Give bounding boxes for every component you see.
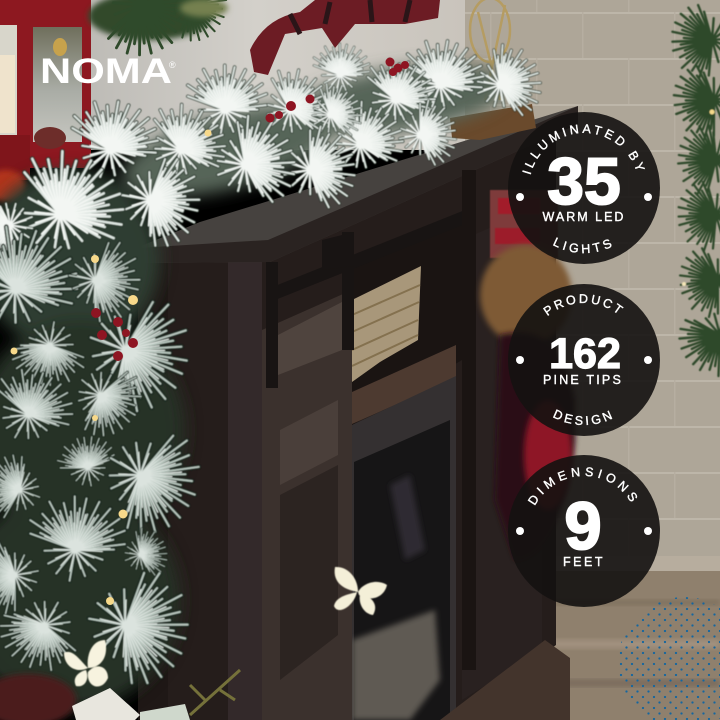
wood floor — [540, 571, 720, 720]
stocking body — [495, 333, 575, 560]
badge: 9 feet — [508, 455, 660, 607]
bell — [53, 38, 67, 56]
red berries — [91, 58, 409, 361]
icon: butterfly left — [64, 640, 108, 687]
fireplace log — [352, 610, 440, 720]
badge side dots — [516, 527, 652, 535]
plaid reindeer — [250, 0, 440, 75]
bottom decorations — [0, 670, 240, 720]
shelf board — [352, 345, 456, 424]
wood block — [450, 104, 536, 140]
badge arc heading: PRODUCT — [543, 294, 624, 316]
icon: butterfly centre — [334, 567, 387, 615]
badge: 35 warm LED lights — [508, 112, 660, 264]
door panel — [280, 400, 338, 485]
brick wall — [440, 0, 720, 560]
pale wall — [85, 0, 465, 150]
lantern — [0, 0, 91, 202]
left panel shading — [138, 262, 168, 720]
cabinet top surface — [136, 106, 578, 263]
badge arc heading: DIMENSIONS — [528, 467, 638, 506]
badge: 162 pine tips — [508, 284, 660, 436]
badge side dots — [516, 356, 652, 364]
lantern glass — [33, 27, 82, 142]
halftone dot circle — [618, 597, 720, 720]
label pine tips: PINE TIPS — [543, 373, 623, 387]
door rail and hangers — [266, 208, 470, 388]
number 35: 35 — [547, 144, 621, 218]
label warm LED: WARM LED — [543, 210, 625, 224]
poinsettia — [0, 674, 76, 720]
badge arc heading: ILLUMINATED BY — [522, 124, 646, 174]
garland shadow mass — [0, 53, 513, 710]
warm LED lights — [10, 130, 212, 605]
cabinet body — [138, 130, 556, 720]
fireplace glass — [354, 420, 450, 720]
fire glass reflection — [390, 475, 425, 560]
orange ornament — [0, 170, 26, 202]
lantern frame — [0, 0, 91, 168]
gold wire decoration — [470, 0, 510, 100]
right pine tree — [667, 2, 720, 389]
registered mark: ® — [169, 60, 176, 70]
badge arc footer: LIGHTS — [552, 237, 612, 254]
wicker basket — [352, 266, 421, 382]
number 9: 9 — [564, 489, 602, 564]
candle — [0, 55, 15, 133]
garland — [0, 30, 550, 710]
sliding door — [262, 290, 352, 720]
badge side dots — [516, 193, 652, 201]
basket weave — [352, 285, 420, 366]
stocking red highlight — [524, 400, 572, 510]
stocking — [480, 190, 575, 560]
open shelf recess — [352, 215, 462, 425]
logo: NOMA: NOMA — [40, 52, 172, 91]
white gift — [72, 688, 140, 720]
gold branch — [190, 670, 240, 715]
fireplace frame — [352, 376, 456, 720]
cabinet — [136, 106, 578, 720]
snowy tufts — [0, 30, 550, 691]
cabinet base — [440, 640, 570, 720]
heart ornament — [34, 127, 66, 149]
fur cuff — [480, 245, 572, 345]
right door — [462, 205, 542, 700]
badge arc footer: DESIGN — [552, 409, 612, 426]
label feet: FEET — [563, 555, 605, 569]
number 162: 162 — [549, 330, 621, 378]
baseboard — [540, 556, 720, 572]
top green branch — [88, 0, 237, 69]
